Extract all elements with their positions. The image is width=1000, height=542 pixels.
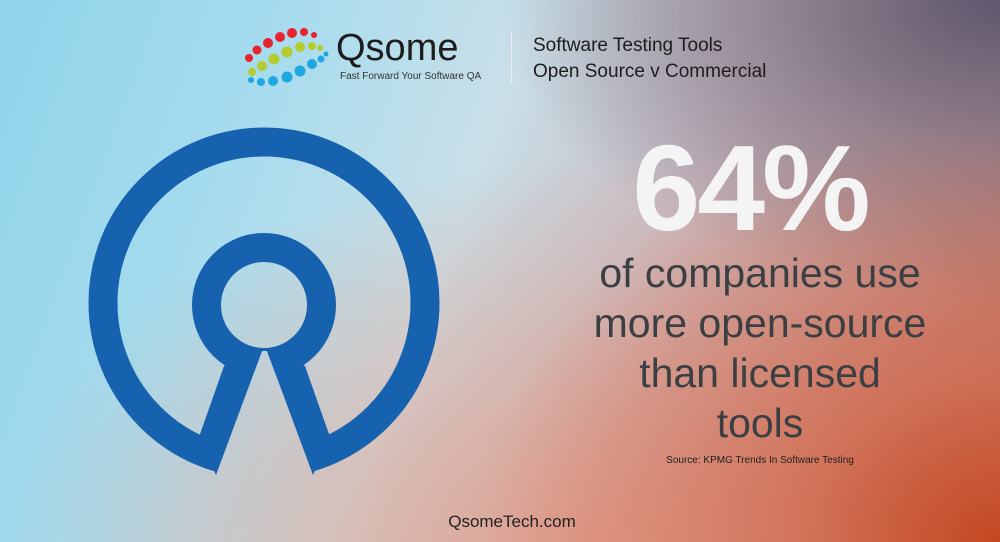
logo: dots	[245, 28, 328, 86]
stat description	[594, 250, 926, 446]
icon: open source keyhole logo	[88, 128, 440, 475]
source note: Source: KPMG Trends In Software Testing	[666, 455, 854, 466]
stat description: than licensed	[639, 350, 881, 396]
logo: tagline: Fast Forward Your Software QA	[340, 71, 481, 82]
footer url: QsomeTech.com	[448, 512, 576, 531]
big stat 64%: 64%	[632, 120, 868, 256]
stat description: tools	[717, 400, 803, 446]
stat description: more open-source	[594, 300, 926, 346]
header title: Open Source v Commercial	[533, 61, 766, 82]
logo: Qsome wordmark: Qsome	[336, 27, 458, 69]
stat description: of companies use	[599, 250, 921, 296]
header title	[533, 35, 766, 82]
header title: Software Testing Tools	[533, 35, 722, 56]
